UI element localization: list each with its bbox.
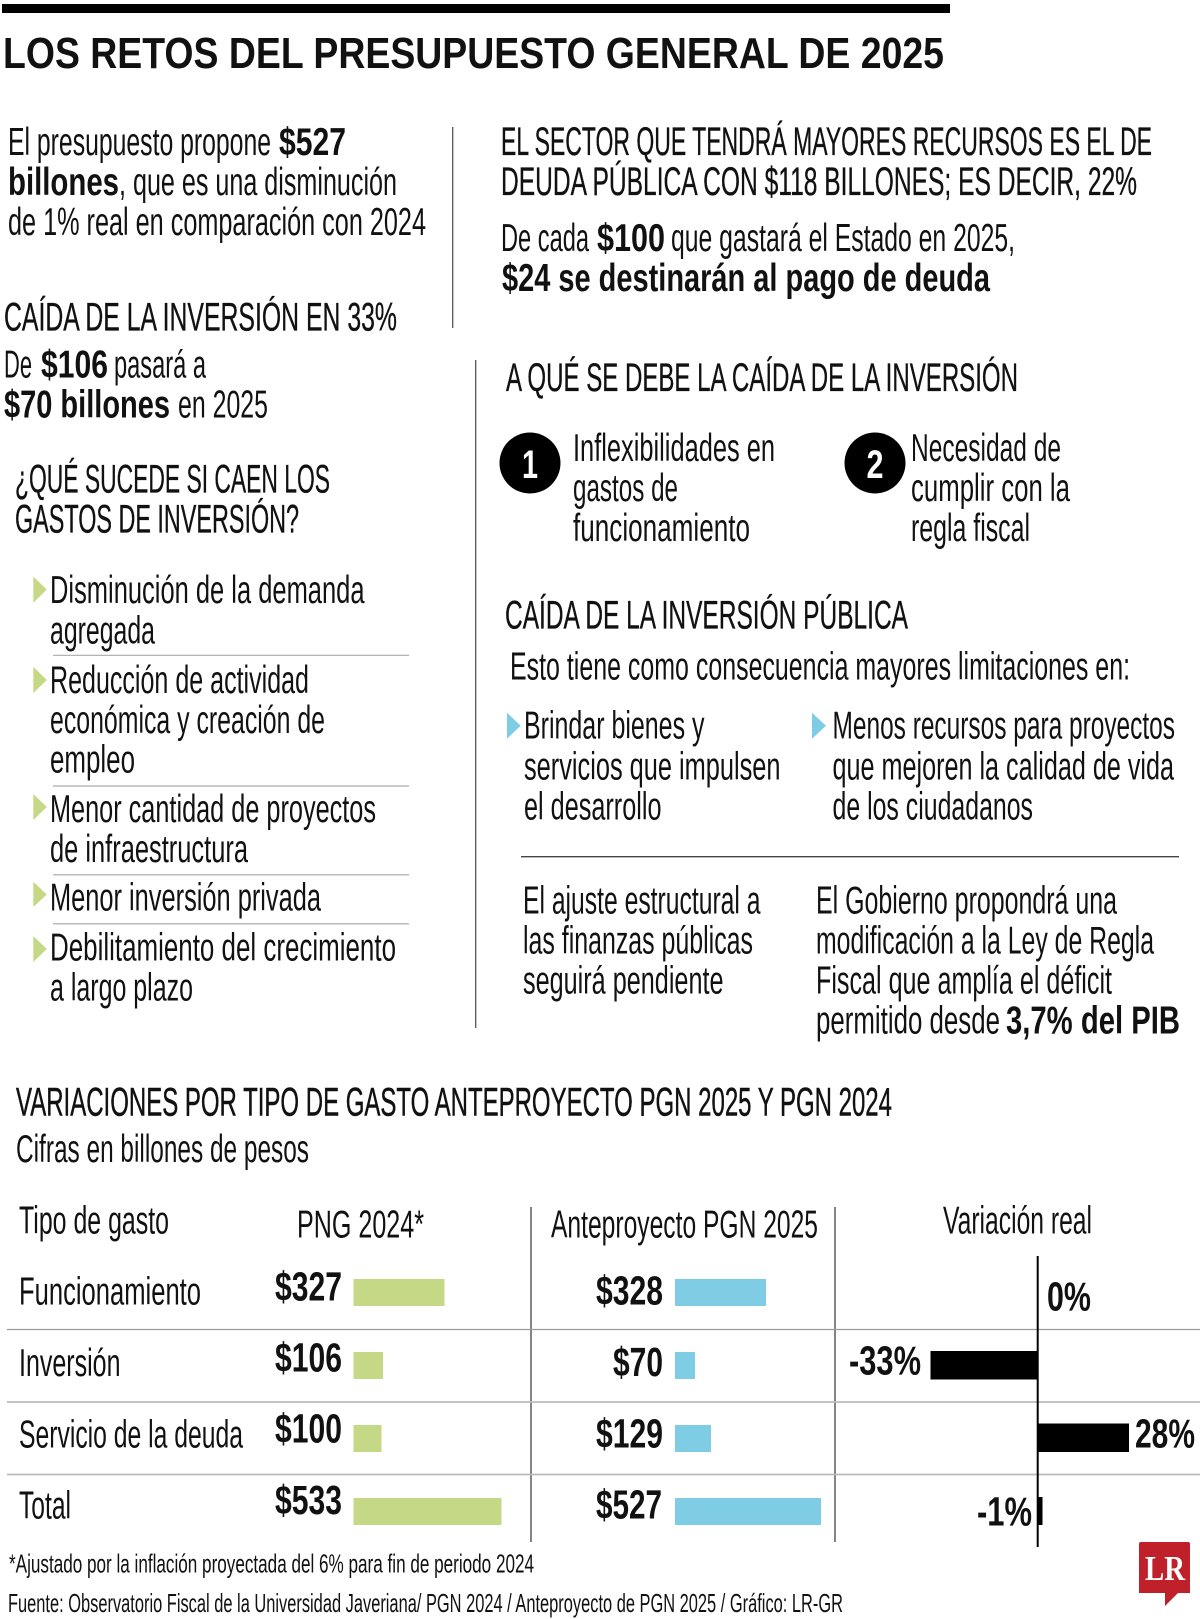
- row: Servicio de la deuda: [19, 1406, 1195, 1456]
- cause 2: [911, 427, 1070, 550]
- list item 5: a largo plazo: [50, 966, 193, 1010]
- column headers: Variación real: [943, 1200, 1092, 1242]
- text block: investment drop: [4, 294, 397, 426]
- list item 3: Menor cantidad de proyectos: [50, 788, 376, 831]
- text block: debt payment: $24 se destinarán al pago de deuda: [502, 257, 990, 300]
- list item 3: [50, 788, 376, 871]
- list item 1: agregada: [50, 610, 155, 652]
- cause 1: [573, 427, 775, 550]
- logo: LR: [1139, 1542, 1190, 1606]
- row: Funcionamiento: [19, 1264, 1091, 1320]
- cause 1: Inflexibilidades en: [573, 427, 775, 470]
- limitation 2: de los ciudadanos: [832, 786, 1033, 828]
- logo: LR: LR: [1145, 1549, 1186, 1588]
- list item 2: empleo: [50, 738, 135, 782]
- text block: budget proposal: billones: [8, 161, 119, 204]
- cause 2: cumplir con la: [911, 467, 1070, 510]
- icon: number 1: [500, 432, 560, 494]
- text block: budget proposal: $527: [279, 121, 346, 164]
- row: Total: $533: [275, 1477, 342, 1523]
- list item 2: [50, 659, 325, 782]
- subtitle: Cifras en billones de pesos: [16, 1128, 309, 1171]
- text block: structural adjustment: El ajuste estructural a: [523, 880, 761, 922]
- row: Servicio de la deuda: $129: [596, 1410, 663, 1456]
- text block: investment drop: en 2025: [178, 384, 268, 426]
- limitation 1: servicios que impulsen: [524, 746, 780, 788]
- heading: what happens: ¿QUÉ SUCEDE SI CAEN LOS: [15, 456, 330, 502]
- row: Servicio de la deuda: $100: [275, 1406, 342, 1452]
- limitation 1: Brindar bienes y: [524, 704, 705, 748]
- icon: bullet 4: [33, 882, 47, 907]
- row: Funcionamiento: Funcionamiento: [19, 1270, 201, 1314]
- text block: debt payment: De cada: [501, 217, 589, 260]
- list item 1: [50, 569, 365, 652]
- cause 1: gastos de: [573, 467, 678, 510]
- text block: investment drop: $70 billones: [4, 384, 170, 426]
- text block: structural adjustment: [523, 880, 761, 1002]
- icon: blue bullet 2: [812, 713, 826, 739]
- icon: bullet 5: [33, 936, 47, 962]
- table: spending: [7, 1200, 1200, 1547]
- row: Inversión: Inversión: [19, 1342, 120, 1385]
- column headers: Anteproyecto PGN 2025: [551, 1204, 818, 1246]
- row: Total: $527: [596, 1482, 662, 1528]
- row: Inversión: $106: [275, 1334, 342, 1380]
- icon: bullet 2: [33, 667, 47, 693]
- text block: debt payment: [501, 217, 1015, 300]
- top bar: [2, 4, 950, 13]
- row: Servicio de la deuda: Servicio de la deuda: [19, 1414, 243, 1456]
- text block: investment drop: De: [4, 344, 32, 386]
- text block: structural adjustment: seguirá pendiente: [523, 960, 724, 1002]
- column headers: Tipo de gasto: [19, 1200, 169, 1242]
- heading: public investment drop: CAÍDA DE LA INVERSIÓN PÚBLICA: [505, 592, 908, 638]
- text block: fiscal rule: [816, 880, 1180, 1042]
- text block: fiscal rule: permitido desde: [816, 1000, 1000, 1042]
- title: LOS RETOS DEL PRESUPUESTO GENERAL DE 2025: [3, 30, 944, 78]
- row: Inversión: $70: [613, 1339, 663, 1385]
- row: Funcionamiento: $327: [275, 1264, 342, 1310]
- list item 5: Debilitamiento del crecimiento: [50, 926, 396, 970]
- list item 1: Disminución de la demanda: [50, 569, 365, 612]
- limitation 1: el desarrollo: [524, 786, 662, 828]
- list item 3: de infraestructura: [50, 828, 248, 871]
- row: Funcionamiento: 0%: [1047, 1274, 1091, 1320]
- text block: budget proposal: El presupuesto propone: [8, 121, 271, 164]
- icon: blue bullet 1: [507, 713, 521, 739]
- cause 2: Necesidad de: [911, 427, 1061, 470]
- row: Total: Total: [19, 1484, 71, 1528]
- heading: what happens: [15, 456, 330, 542]
- list item 4: Menor inversión privada: [50, 876, 321, 920]
- list item 2: económica y creación de: [50, 699, 325, 742]
- cause 2: regla fiscal: [911, 507, 1030, 550]
- heading: what happens: GASTOS DE INVERSIÓN?: [15, 496, 299, 542]
- icon: number 2: [844, 432, 906, 494]
- footnote: *Ajustado por la inflación proyectada del 6% para fin de periodo 2024: [9, 1548, 534, 1578]
- row: Total: [19, 1477, 1042, 1534]
- text block: debt payment: $100: [597, 217, 665, 260]
- limitation 1: [524, 704, 780, 828]
- text block: investment drop: pasará a: [114, 344, 206, 386]
- list item 2: Reducción de actividad: [50, 659, 309, 702]
- column headers: [19, 1200, 1092, 1246]
- row: Funcionamiento: $328: [596, 1268, 663, 1314]
- list: consequences: [33, 569, 409, 1010]
- row: Inversión: -33%: [849, 1338, 921, 1384]
- text block: investment drop: CAÍDA DE LA INVERSIÓN EN 33%: [4, 294, 397, 340]
- text block: investment drop: $106: [41, 344, 108, 386]
- text block: budget proposal: de 1% real en comparación con 2024: [8, 201, 426, 244]
- text block: structural adjustment: las finanzas públicas: [523, 920, 753, 962]
- column headers: PNG 2024*: [297, 1204, 424, 1246]
- text block: budget proposal: [8, 121, 426, 244]
- heading: debt sector: [501, 119, 1152, 204]
- text block: debt payment: que gastará el Estado en 2025,: [671, 217, 1015, 260]
- text block: budget proposal: , que es una disminución: [119, 161, 397, 204]
- icon: bullet 3: [33, 794, 47, 820]
- cause 1: funcionamiento: [573, 507, 750, 550]
- limitation 2: [832, 704, 1175, 828]
- row: Inversión: [19, 1334, 1038, 1385]
- list item 5: [50, 926, 396, 1010]
- row: Total: -1%: [977, 1488, 1032, 1534]
- icon: number 1: 1: [522, 443, 538, 487]
- icon: bullet 1: [33, 576, 47, 603]
- icon: number 2: 2: [866, 443, 884, 487]
